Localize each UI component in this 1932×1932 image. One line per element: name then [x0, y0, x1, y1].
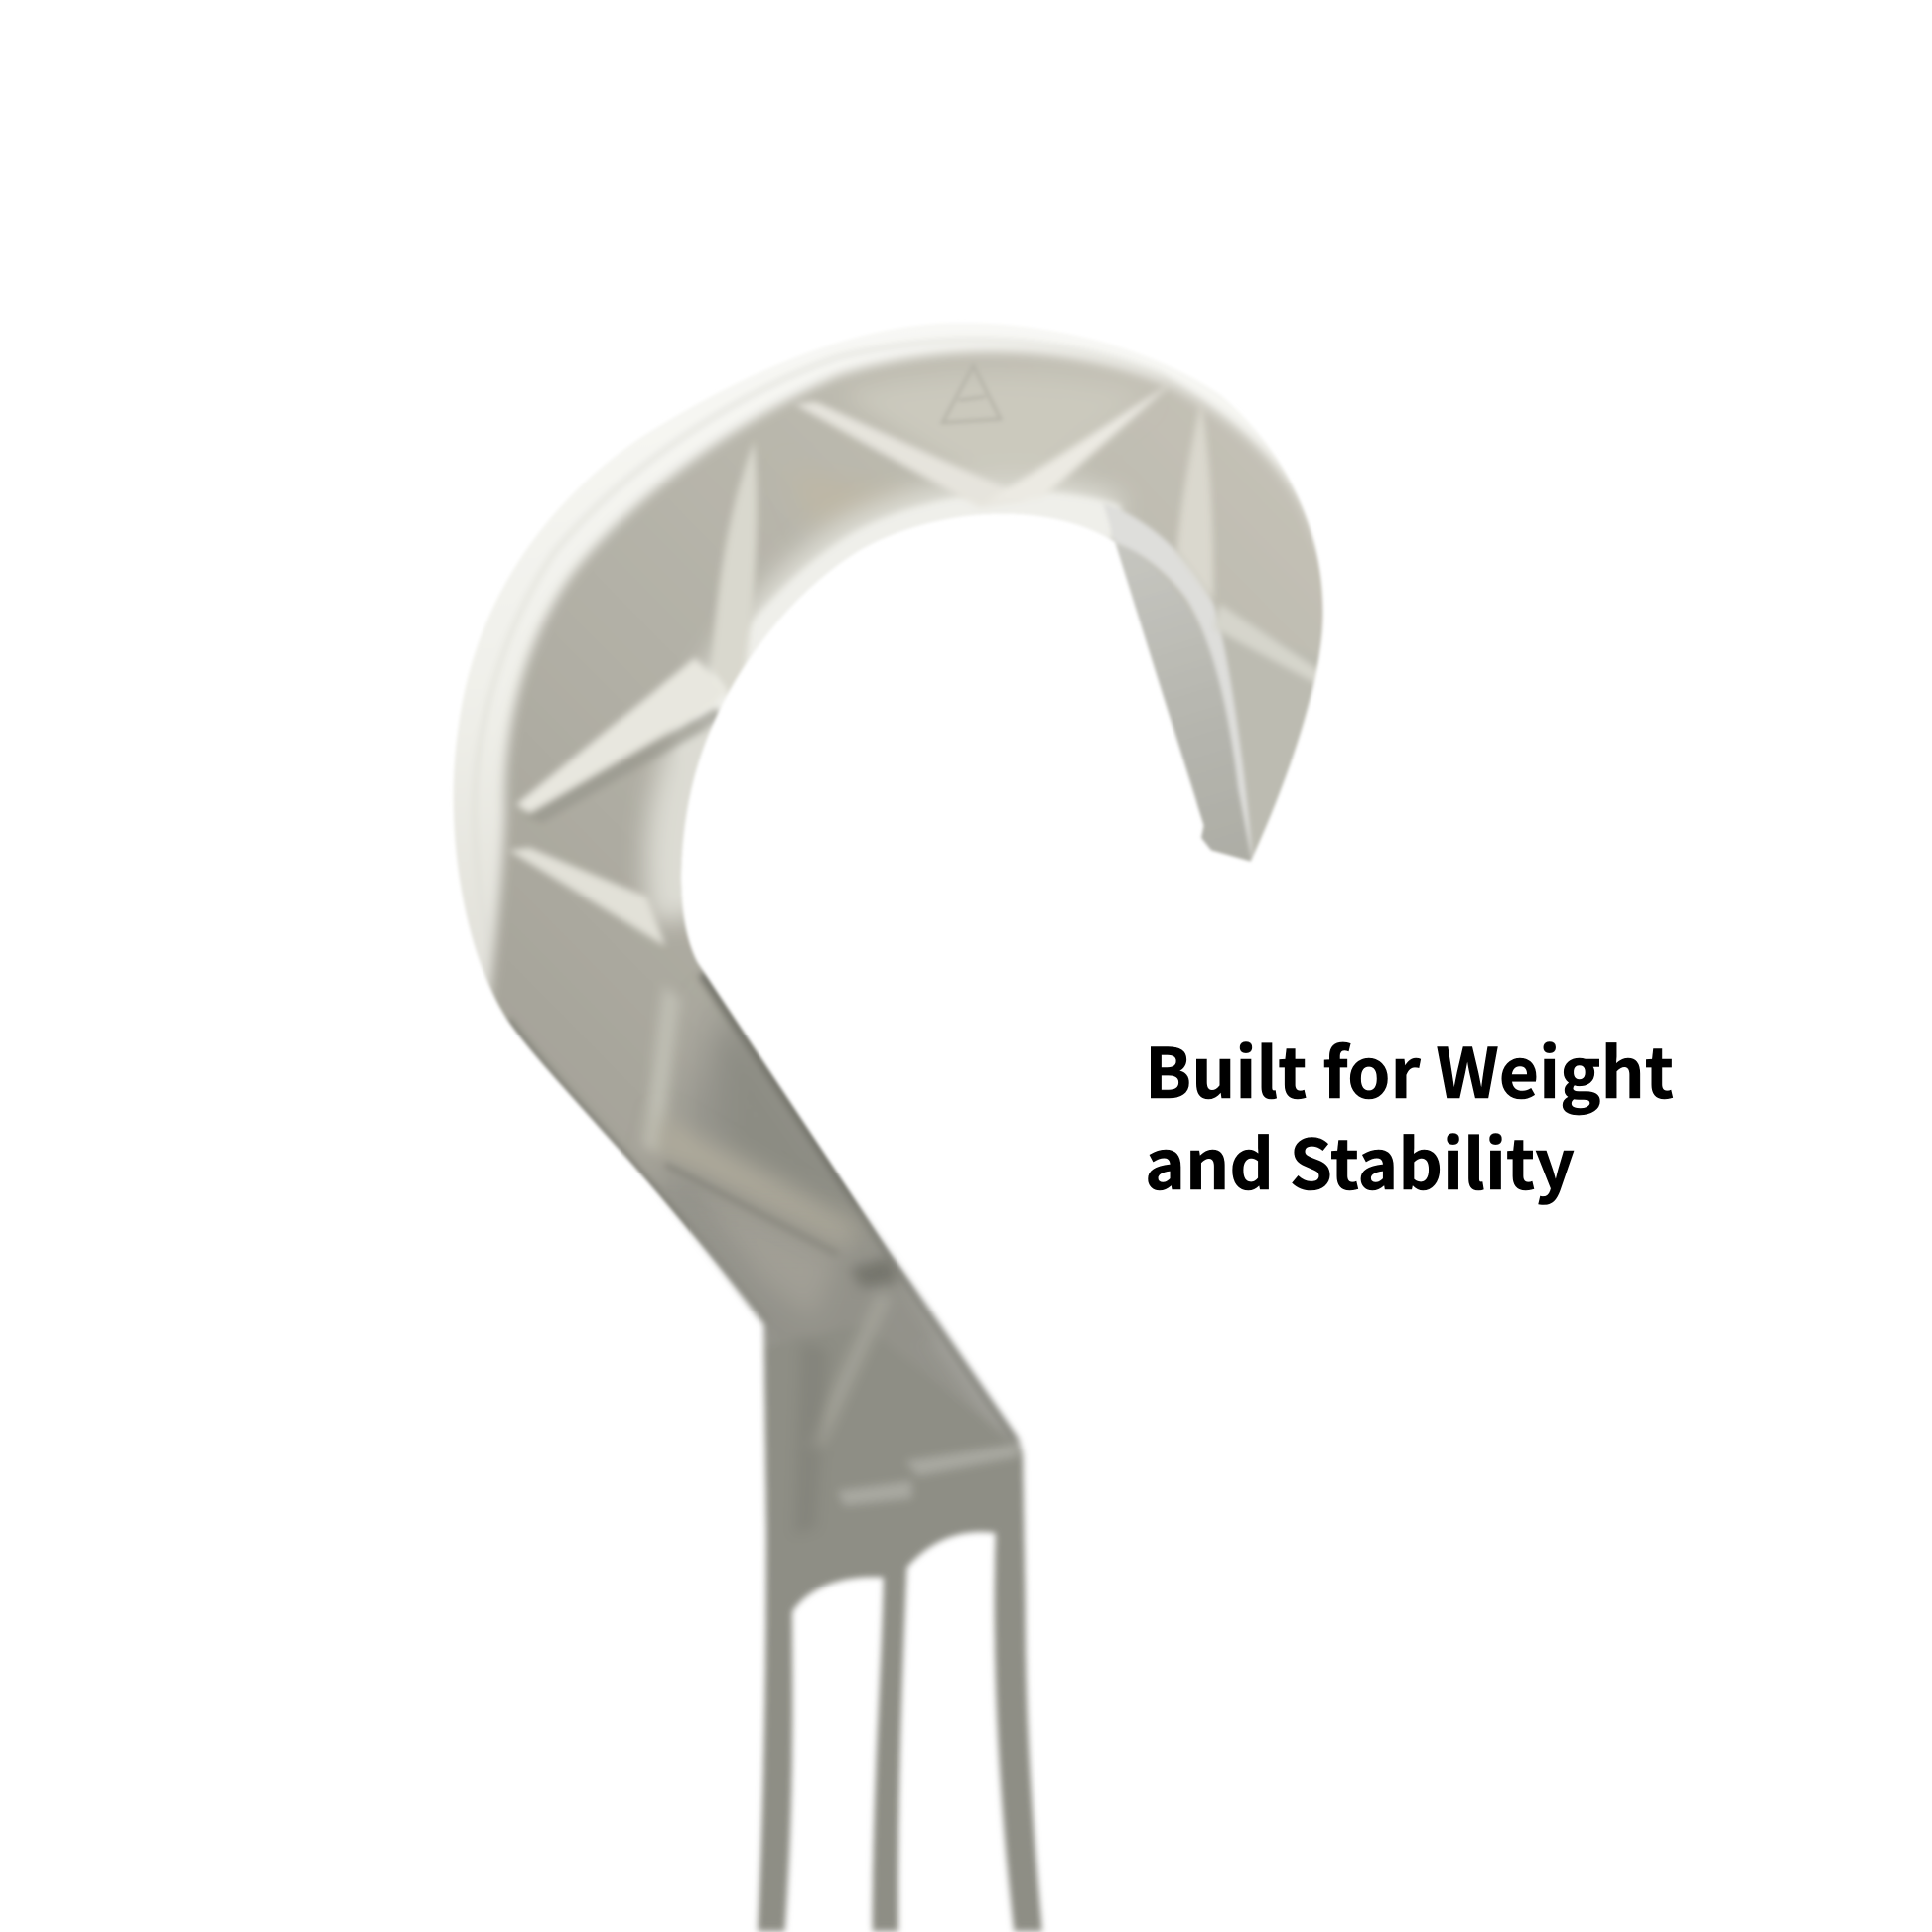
- rib: right vertical: [1176, 400, 1213, 602]
- lower stem shading: [659, 1019, 1038, 1932]
- rib: left diagonal: [516, 658, 727, 813]
- stem upper shadow: [829, 1188, 830, 1189]
- rib: neck notch: [850, 1257, 899, 1288]
- tip ridge lip: [1103, 502, 1253, 865]
- dark edge of stem: [702, 973, 1019, 1440]
- warm shadow patch: [788, 469, 936, 530]
- rib: leg junction ridges: [838, 1445, 1021, 1506]
- lower hook with softer focus: [419, 296, 1355, 1932]
- hook inner face: [486, 351, 1355, 1343]
- reinforcing ribs: [509, 366, 1320, 1534]
- tip lower face: [1213, 617, 1343, 888]
- rib: stem vertical: [643, 986, 680, 1152]
- icon: recycling triangle mark: [942, 366, 1001, 423]
- crown highlight: [858, 377, 1118, 471]
- rib: stem diagonal highlight: [655, 1115, 860, 1247]
- rib: left vertical: [712, 441, 757, 712]
- rib: tip diagonal: [1217, 606, 1316, 683]
- rib: neck valley: [794, 1343, 828, 1534]
- rim groove: [522, 338, 1167, 609]
- rib: neck stripe: [807, 1294, 893, 1448]
- inner arch lip: [709, 510, 1115, 727]
- inner arch lip glow: [680, 511, 1109, 918]
- dark edge of lower left: [507, 1021, 763, 1324]
- title: Built for Weight and Stability: Built for Weight: [1145, 1019, 1674, 1118]
- rib: left diagonal shadow: [523, 707, 727, 823]
- stem lower light area: [717, 1207, 831, 1305]
- rib: stem diagonal crease: [665, 1165, 838, 1254]
- rib: top right diagonal: [1009, 388, 1164, 492]
- title: Built for Weight and Stability: and Stability: [1145, 1110, 1575, 1209]
- product photo: white plastic hanging hook: [453, 324, 1324, 1932]
- title: Built for Weight and Stability: [1145, 1019, 1674, 1209]
- hook rim: [453, 324, 1281, 991]
- back of hook tip: [1109, 536, 1252, 865]
- rib: lower left diagonal: [509, 848, 665, 946]
- rib: top left diagonal: [796, 399, 1001, 505]
